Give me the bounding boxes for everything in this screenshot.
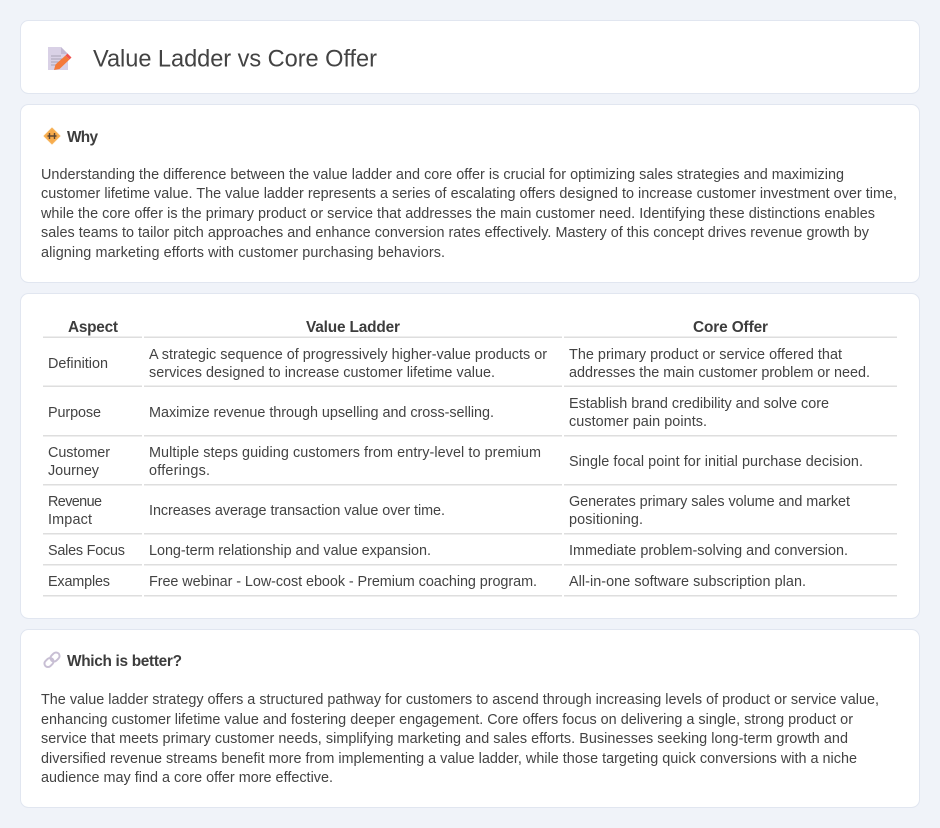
row: customer journey: Multiple steps guiding customers from entry-level to premium <box>149 445 541 461</box>
row: definition: A strategic sequence of progressively higher-value products or <box>149 347 547 363</box>
row: definition: services designed to increase customer lifetime value. <box>149 365 495 381</box>
text block: why paragraph: while the core offer is the primary product or service that addresses the main customer need. Identifying these distinctions enables <box>40 206 875 222</box>
text block: which is better paragraph: audience may find a core offer more effective. <box>41 770 333 786</box>
row: sales focus: Sales Focus <box>48 543 125 559</box>
row: customer journey: Customer <box>48 445 110 461</box>
icon: warning diamond <box>44 128 60 144</box>
row: customer journey: Journey <box>48 463 100 479</box>
row: examples: Examples <box>48 574 110 590</box>
row: definition: addresses the main customer problem or need. <box>569 365 870 381</box>
row: revenue impact: Impact <box>48 512 92 528</box>
row: revenue impact: Generates primary sales volume and market <box>569 494 850 510</box>
table header row: Core Offer <box>693 319 768 336</box>
text block: which is better paragraph <box>41 692 879 786</box>
table header row: Value Ladder <box>306 319 400 336</box>
row: definition: Definition <box>48 356 108 372</box>
row: purpose <box>48 396 829 430</box>
row: definition: The primary product or service offered that <box>569 347 842 363</box>
row: examples <box>48 574 806 590</box>
row: sales focus: Immediate problem-solving and conversion. <box>569 543 848 559</box>
text block: which is better paragraph: enhancing customer lifetime value and fostering deeper engagement. Core offers focus on delivering a single, strong product or <box>41 712 853 728</box>
row: purpose: Purpose <box>48 405 101 421</box>
row: sales focus <box>48 543 848 559</box>
text block: which is better paragraph: service that meets primary customer needs, simplifying marketing and sales efforts. Businesses seeking long-term growth and <box>41 731 848 747</box>
row: purpose: Maximize revenue through upselling and cross-selling. <box>149 405 494 421</box>
text block: why paragraph: customer lifetime value. The value ladder represents a series of escalating offers designed to increase customer investment over time, <box>41 186 897 202</box>
text block: why paragraph <box>40 167 897 261</box>
row: customer journey: Single focal point for initial purchase decision. <box>569 454 863 470</box>
row: purpose: customer pain points. <box>569 414 707 430</box>
text block: which is better paragraph: The value ladder strategy offers a structured pathway for customers to ascend through increasing levels of product or service value, <box>41 692 879 708</box>
heading: why: Why <box>67 129 98 146</box>
row: examples: Free webinar - Low-cost ebook - Premium coaching program. <box>149 574 537 590</box>
text block: why paragraph: aligning marketing efforts with customer purchasing behaviors. <box>41 245 445 261</box>
panel: comparison table <box>20 294 920 618</box>
panel: why <box>20 104 920 282</box>
row: revenue impact: Increases average transaction value over time. <box>149 503 445 519</box>
row: revenue impact: positioning. <box>569 512 643 528</box>
row: revenue impact <box>48 494 850 528</box>
table header row <box>68 319 768 336</box>
row: revenue impact: Revenue <box>48 494 102 510</box>
row: examples: All-in-one software subscription plan. <box>569 574 806 590</box>
title: Value Ladder vs Core Offer <box>93 46 377 72</box>
text block: why paragraph: sales teams to tailor pitch approaches and enhance conversion rates effectively. Mastery of this concept drives revenue growth by <box>41 225 870 241</box>
panel: which is better <box>20 630 920 808</box>
row: definition <box>48 347 870 381</box>
heading: which is better: Which is better? <box>67 653 182 670</box>
table header row: Aspect <box>68 319 118 336</box>
text block: which is better paragraph: diversified revenue streams benefit more from implementing a value ladder, while those targeting quick conversions with a niche <box>41 751 857 767</box>
icon: chain link <box>43 651 61 669</box>
text block: why paragraph: Understanding the difference between the value ladder and core offer is crucial for optimizing sales strategies and maximizing <box>41 167 844 183</box>
row: customer journey <box>48 445 863 479</box>
row: purpose: Establish brand credibility and solve core <box>569 396 829 412</box>
row: customer journey: offerings. <box>149 463 210 479</box>
icon: document with pencil <box>48 47 72 70</box>
row: sales focus: Long-term relationship and value expansion. <box>149 543 431 559</box>
panel: title header <box>20 20 920 94</box>
